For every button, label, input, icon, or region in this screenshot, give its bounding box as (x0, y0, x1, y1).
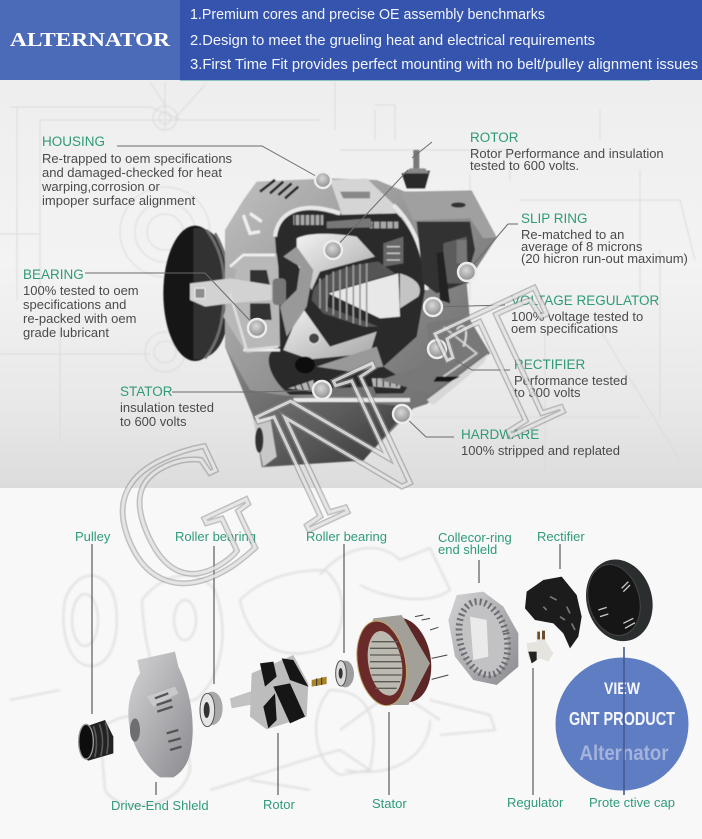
callout button: view GNT product: VIEW (604, 679, 641, 698)
top band (330, 178, 407, 218)
header banner (0, 0, 702, 81)
labels: exploded view parts: Regulator (507, 795, 564, 810)
pulley (163, 226, 230, 361)
callout: rotor: tested to 600 volts. (470, 158, 579, 173)
callout: rectifier: RECTIFIER (514, 357, 586, 372)
header feature list: 3.First Time Fit provides perfect mounting with no belt/pulley alignment issues (190, 56, 698, 73)
leader lines: exploded view (92, 544, 624, 795)
callout: housing: Re-trapped to oem specifications (42, 151, 233, 166)
labels: exploded view parts: Stator (372, 796, 407, 811)
part: protective cap (577, 552, 662, 649)
callout: rotor (470, 130, 664, 173)
callout: hardware: HARDWARE (461, 427, 539, 442)
panel: upper background (0, 80, 702, 488)
callout: rectifier: to 300 volts (514, 385, 581, 400)
panel: lower background (0, 488, 702, 839)
callout: rotor: ROTOR (470, 130, 519, 145)
callout button: view GNT product (556, 658, 688, 790)
part: roller bearing 1 (200, 692, 223, 727)
part: pulley (79, 720, 113, 761)
callout: voltage regulator: 100% voltage tested to (511, 309, 643, 324)
rectifier and slip ring area (417, 222, 475, 293)
part: stator (351, 613, 448, 710)
callout: hardware (461, 427, 620, 458)
markers: callout points (248, 172, 476, 423)
callout: housing: and damaged-checked for heat (42, 165, 222, 180)
callout: slip ring: (20 hicron run-out maximum) (521, 251, 688, 266)
header title block (0, 0, 180, 80)
housing body (225, 178, 497, 467)
callout: bearing: specifications and (23, 297, 126, 312)
labels: exploded view parts: end shleld (438, 542, 497, 557)
callout: bearing: BEARING (23, 267, 84, 282)
part: regulator (527, 631, 553, 663)
callout button: view GNT product: GNT PRODUCT (569, 709, 675, 729)
callout: stator (120, 384, 214, 429)
labels: exploded view parts: Roller bearing (306, 529, 387, 544)
callout: housing: HOUSING (42, 134, 105, 149)
callout: housing: impoper surface alignment (42, 193, 196, 208)
callout: voltage regulator: VOLTAGE REGULATOR (511, 293, 660, 308)
leader lines: upper diagram (85, 142, 518, 437)
callout button: view GNT product: Alternator (580, 742, 668, 765)
callout: rectifier (514, 357, 627, 400)
rotor top terminal (413, 150, 419, 173)
callout: slip ring: SLIP RING (521, 211, 588, 226)
inner cavity (269, 210, 425, 395)
stator windings (293, 215, 398, 228)
lower housing (225, 347, 410, 467)
header feature list: 1.Premium cores and precise OE assembly benchmarks (190, 6, 545, 23)
callout: stator: STATOR (120, 384, 173, 399)
labels: exploded view parts: Rectifier (537, 529, 585, 544)
labels: exploded view parts: Pulley (75, 529, 111, 544)
labels: exploded view parts: Prote ctive cap (589, 795, 675, 810)
labels: exploded view parts: Collecor-ring (438, 530, 512, 545)
fins (260, 180, 298, 198)
lower cavity (317, 347, 383, 372)
callout: stator: to 600 volts (120, 414, 187, 429)
part: rectifier (525, 577, 582, 648)
labels: exploded view parts: Drive-End Shleld (111, 798, 209, 813)
callout: rotor: Rotor Performance and insulation (470, 146, 664, 161)
callout: slip ring: Re-matched to an (521, 227, 624, 242)
callout: bearing: re-packed with oem (23, 311, 136, 326)
labels: exploded view parts (75, 529, 675, 813)
part: collector-ring end shield (448, 592, 518, 685)
illustration: cutaway alternator (163, 150, 497, 467)
callout: bearing (23, 267, 139, 340)
labels: exploded view parts: Rotor (263, 797, 295, 812)
part: drive-end shield (128, 652, 193, 777)
callout: voltage regulator (511, 293, 660, 336)
rotor claw poles (297, 234, 375, 290)
front bearing housing (223, 253, 280, 353)
blueprint sketch: upper background lines (0, 82, 695, 470)
header title block: ALTERNATOR (10, 29, 171, 51)
callout: housing: warping,corrosion or (41, 179, 160, 194)
callout: hardware: 100% stripped and replated (461, 443, 620, 458)
callout: rectifier: Performance tested (514, 373, 627, 388)
part: roller bearing 2 (336, 661, 354, 687)
header feature list: 2.Design to meet the grueling heat and electrical requirements (190, 32, 595, 49)
header feature list (190, 6, 698, 73)
blueprint sketch: lower ghost alternator (10, 548, 495, 805)
watermark: GNT: GNT (79, 247, 607, 642)
callout: bearing: grade lubricant (23, 325, 109, 340)
callout: slip ring: average of 8 microns (521, 239, 643, 254)
watermark: GNT: GNT (79, 247, 607, 642)
callout: voltage regulator: oem specifications (511, 321, 618, 336)
callout: bearing: 100% tested to oem (23, 283, 139, 298)
callout: stator: insulation tested (120, 400, 214, 415)
part: rotor (230, 655, 327, 729)
callout: housing (41, 134, 233, 208)
callout: slip ring (521, 211, 688, 266)
shaft and nut (190, 278, 272, 307)
labels: exploded view parts: Roller bearing (175, 529, 256, 544)
mounting ear (400, 192, 497, 238)
